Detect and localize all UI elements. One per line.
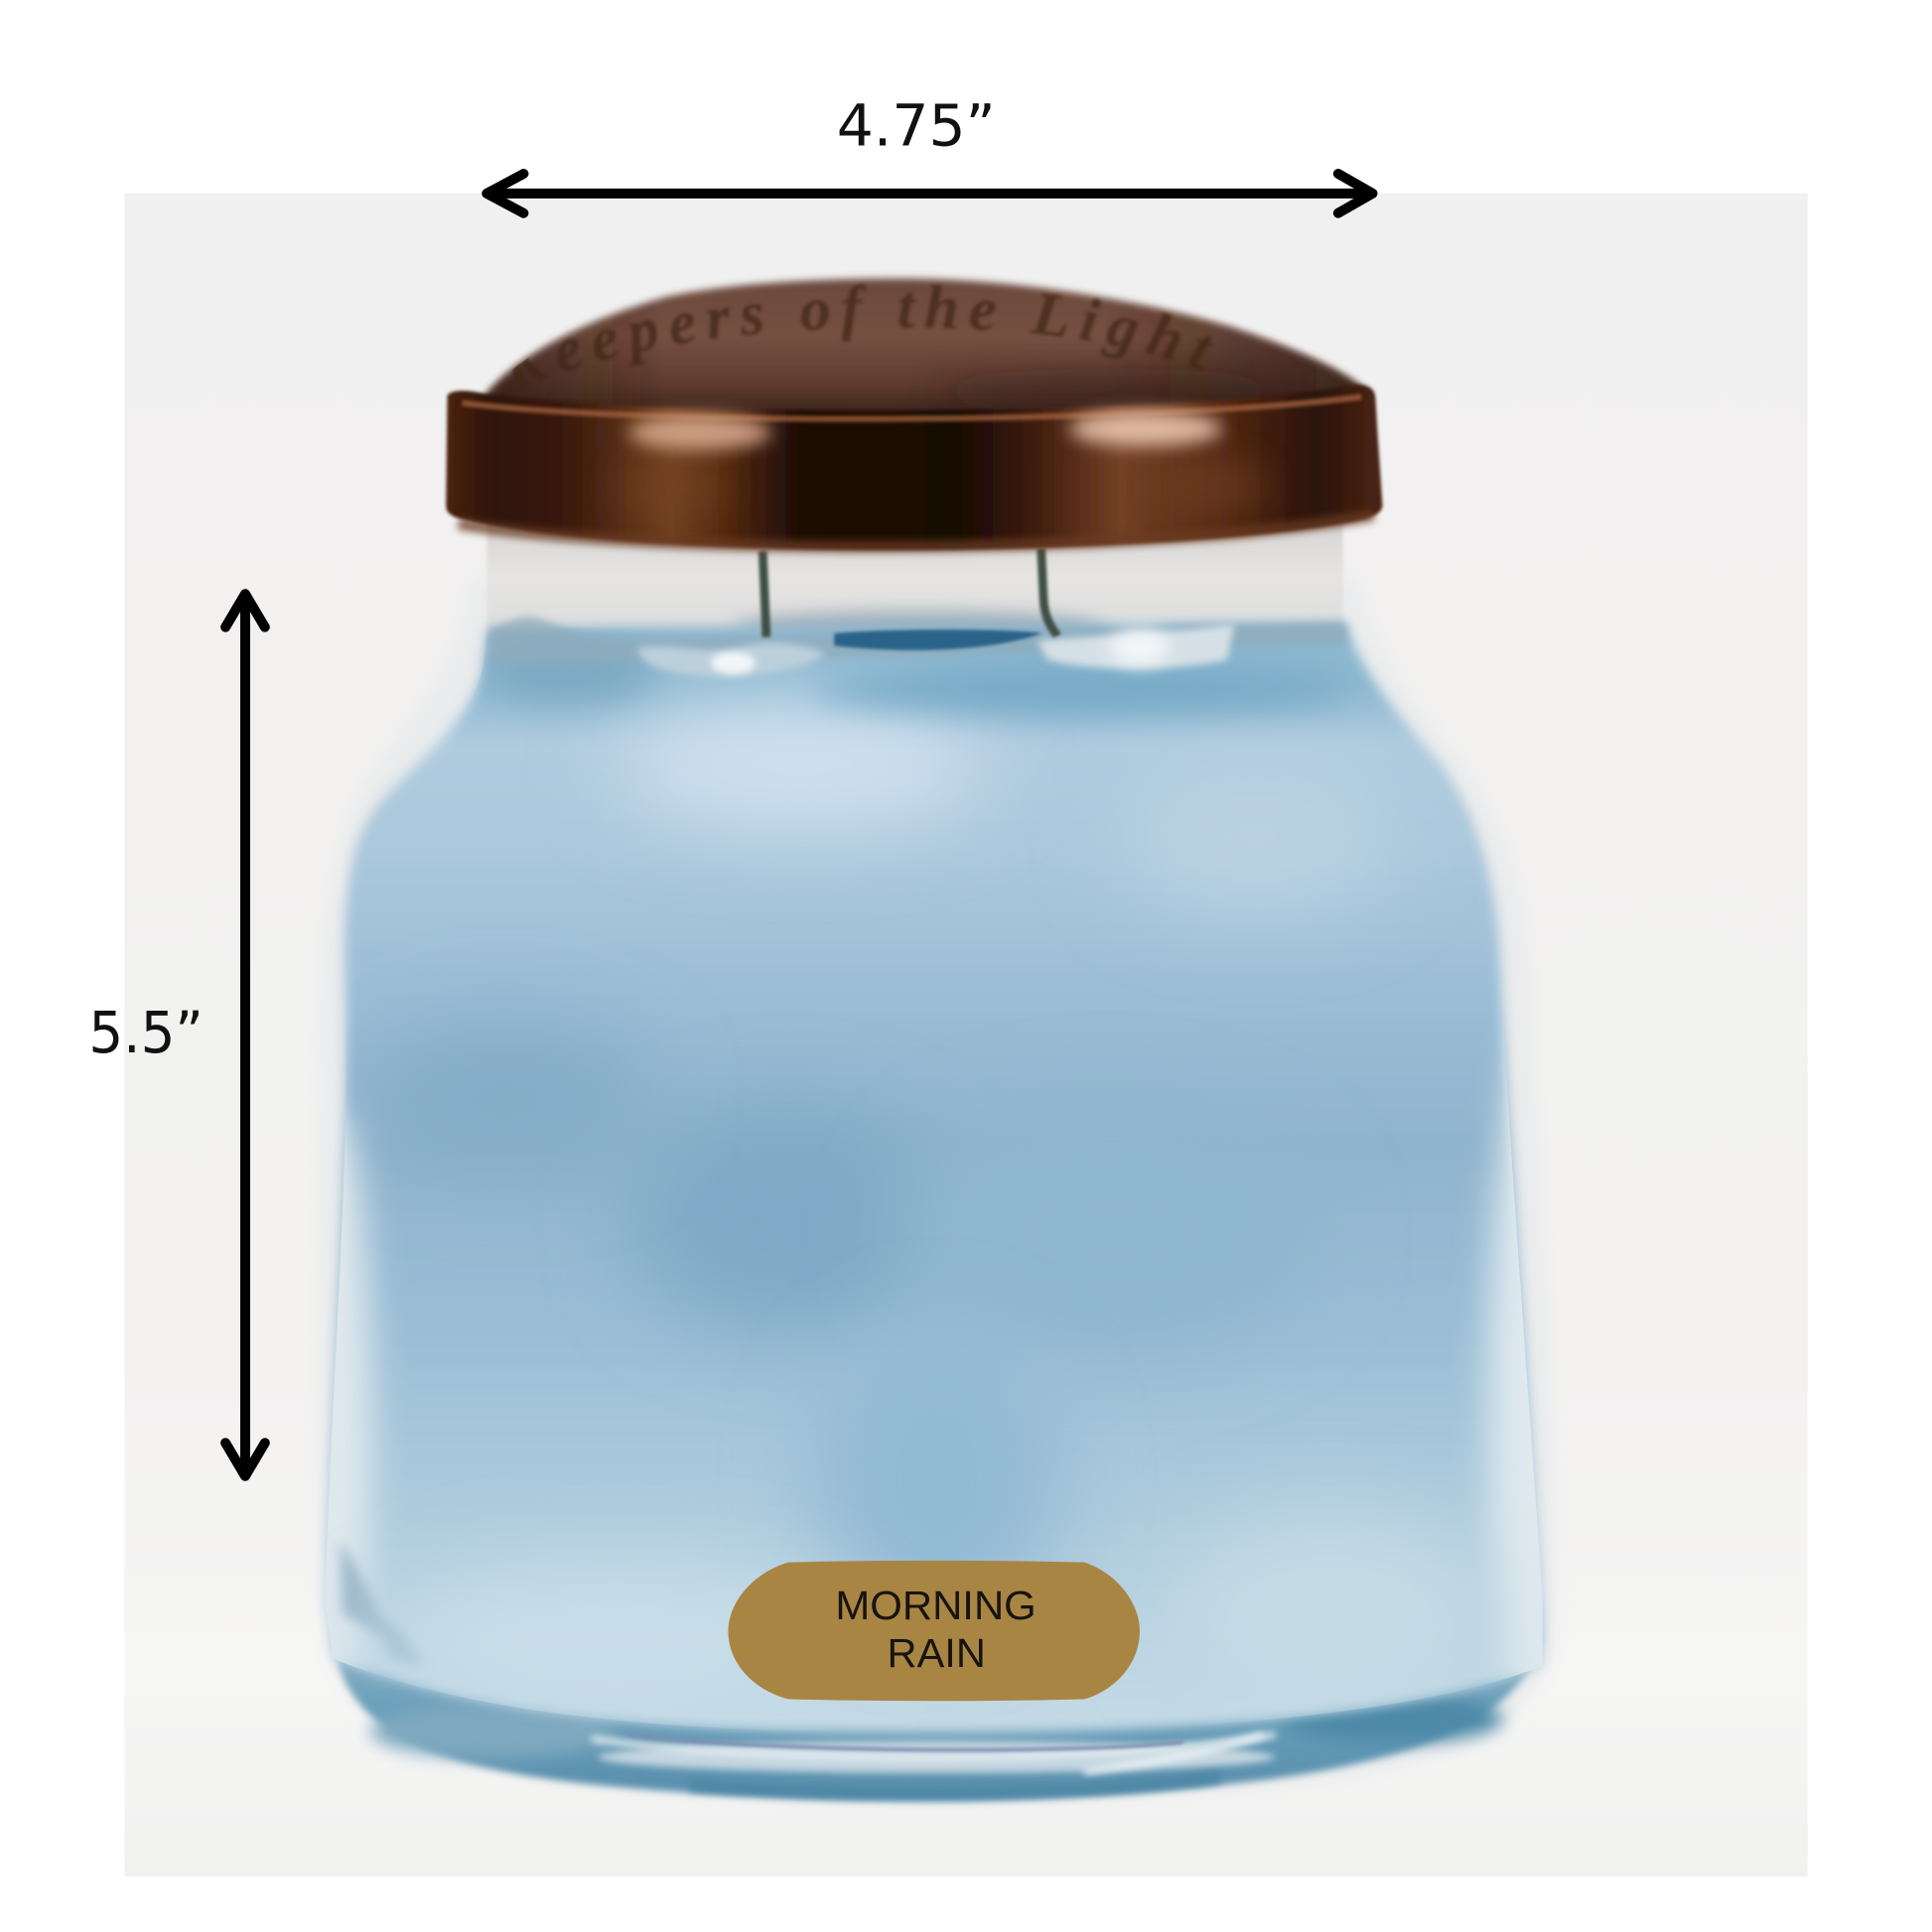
label text: MORNING (835, 1583, 1036, 1628)
glass base (333, 1601, 1542, 1799)
product label (728, 1561, 1140, 1701)
glass neck (486, 517, 1343, 647)
wax body (298, 622, 1591, 1762)
height arrow (225, 594, 265, 1476)
lid dome with embossed text: Keepers of the Light (510, 283, 1213, 387)
width label: 4.75” (837, 91, 996, 159)
label text (835, 1583, 1036, 1676)
height label: 5.5” (88, 999, 204, 1066)
neck shadow above wax (733, 612, 1103, 640)
wax top surface with melted pools (487, 617, 1348, 677)
label text: RAIN (888, 1630, 986, 1676)
jar glass halo (320, 579, 1555, 1800)
lid rim (446, 385, 1382, 550)
wicks (762, 548, 1057, 637)
candle jar (258, 272, 1554, 1807)
photo panel (124, 194, 1808, 1876)
width arrow (486, 174, 1373, 213)
wax shading (298, 642, 1591, 1762)
